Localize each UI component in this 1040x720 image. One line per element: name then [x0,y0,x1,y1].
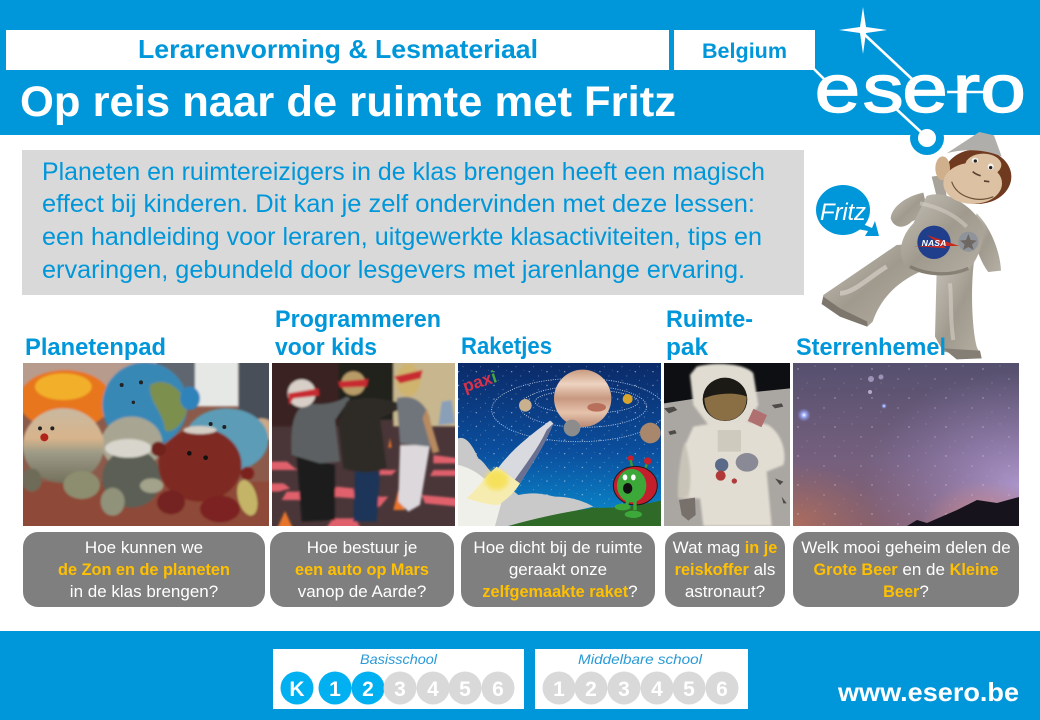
grade scale: Middelbare school: 1 [553,678,565,701]
grade scale: Basisschool: 5 [459,678,471,701]
caption: Ruimtepak: astronaut? [685,582,765,601]
heading: Sterrenhemel: Sterrenhemel [796,334,946,361]
grade scale: Middelbare school: 2 [585,678,597,701]
grade scale: Middelbare school: 6 [716,678,728,701]
country tag [674,30,815,70]
website: www.esero.be [837,677,1019,707]
heading: Programmeren voor kids: voor kids [275,334,377,361]
photo: starry sky [793,363,1019,526]
country tag: Belgium [702,40,787,63]
header band [0,0,1040,135]
caption: Ruimtepak [665,532,785,607]
caption: Raketjes [461,532,655,607]
footer band [0,631,1040,720]
caption: Sterrenhemel: Welk mooi geheim delen de [801,538,1011,557]
caption: Planetenpad: in de klas brengen? [70,582,218,601]
intro text panel: een handleiding voor leraren, uitgewerkte klasactiviteiten, tips en [42,223,762,251]
grade scale: Middelbare school: Middelbare school [578,651,703,667]
intro text panel: effect bij kinderen. Dit kan je zelf ondervinden met deze lessen: [42,190,755,218]
caption: Sterrenhemel: Grote Beer en de Kleine [813,560,999,579]
photo: astronaut on the moon [664,363,790,526]
intro text panel: ervaringen, gebundeld door lesgevers met jarenlange ervaring. [42,256,745,284]
subtitle bar: Lerarenvorming & Lesmateriaal [138,34,538,64]
subtitle bar [6,30,669,70]
grade scale: Basisschool: 4 [427,678,439,701]
intro text panel: Planeten en ruimtereizigers in de klas brengen heeft een magisch [42,158,765,186]
grade scale: Middelbare school: 3 [618,678,630,701]
title: Op reis naar de ruimte met Fritz [20,78,676,126]
caption: Planetenpad [23,532,265,607]
caption: Programmeren voor kids: een auto op Mars [295,561,429,579]
grade scale: Middelbare school [535,649,748,709]
caption: Raketjes: zelfgemaakte raket? [482,582,638,601]
Fritz label bubble [816,185,879,236]
heading: Programmeren voor kids: Programmeren [275,306,441,333]
caption: Sterrenhemel [793,532,1019,607]
logo: esero [813,7,1026,155]
intro text panel [22,150,804,295]
grade scale: Basisschool: K [289,678,305,701]
caption: Programmeren voor kids: vanop de Aarde? [298,582,426,601]
Fritz label bubble: Fritz [820,199,866,226]
caption: Ruimtepak: reiskoffer als [675,560,775,579]
grade scale: Middelbare school: 4 [651,678,663,701]
grade scale: Basisschool [273,649,524,709]
grade scale: Basisschool: 2 [362,678,374,701]
grade scale: Basisschool: 6 [492,678,504,701]
caption: Programmeren voor kids [270,532,454,607]
grade scale: Basisschool: Basisschool [360,651,438,667]
heading: Programmeren voor kids [275,306,441,361]
caption: Ruimtepak: Wat mag in je [673,538,777,557]
photo: plush planets [23,363,269,526]
Fritz monkey astronaut: NASA [922,238,946,248]
caption: Programmeren voor kids: Hoe bestuur je [307,538,417,557]
heading: Ruimtepak [666,306,753,361]
caption: Raketjes: geraakt onze [509,560,607,579]
caption: Raketjes: Hoe dicht bij de ruimte [473,538,643,557]
heading: Ruimtepak: Ruimte- [666,306,753,333]
heading: Planetenpad: Planetenpad [25,334,166,361]
illustration: rocket and planets: paxi [460,366,499,396]
grade scale: Basisschool: 1 [329,678,341,701]
photo: blindfolded teachers [272,363,455,526]
caption: Planetenpad: de Zon en de planeten [58,561,230,579]
grade scale: Middelbare school: 5 [683,678,695,701]
caption: Sterrenhemel: Beer? [883,582,929,601]
Fritz monkey astronaut [822,132,1011,359]
grade scale: Basisschool: 3 [394,678,406,701]
heading: Raketjes: Raketjes [461,333,552,360]
logo: esero: esero [815,50,1026,126]
heading: Ruimtepak: pak [666,334,709,361]
illustration: rocket and planets [458,363,661,526]
caption: Planetenpad: Hoe kunnen we [85,538,203,557]
